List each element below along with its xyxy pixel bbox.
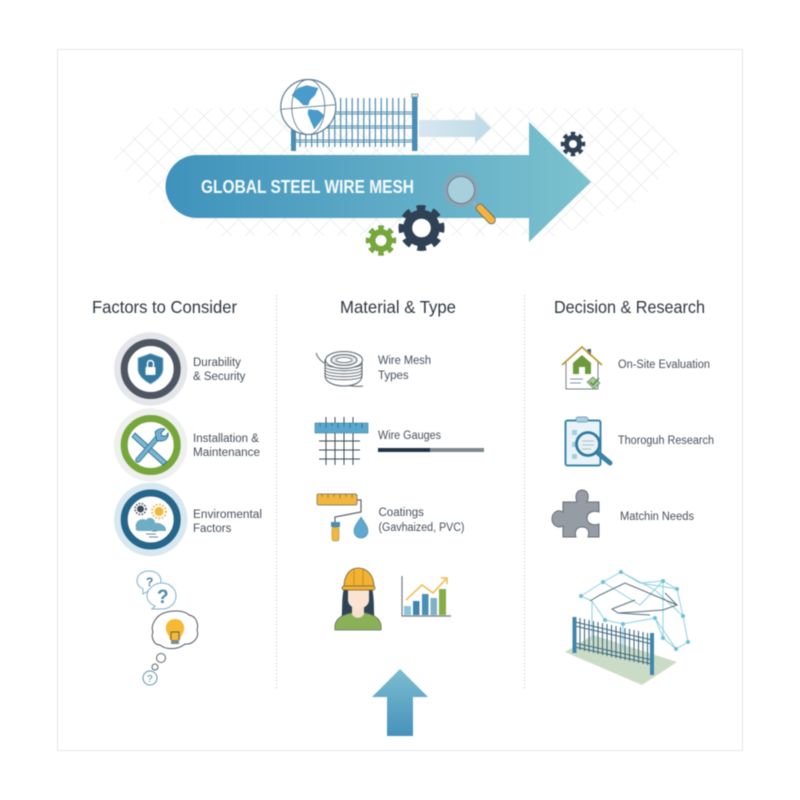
main arrow — [166, 122, 591, 242]
label: installation: Maintenance — [193, 447, 260, 459]
header banner — [110, 80, 680, 254]
panel: decision and research — [552, 297, 714, 685]
title: GLOBAL STEEL WIRE MESH — [201, 177, 414, 197]
network — [579, 570, 690, 651]
label: environmental: Factors — [193, 523, 232, 535]
icon: wire coil — [316, 352, 363, 386]
icon: shield — [138, 354, 163, 384]
icon: clipboard — [566, 417, 610, 466]
heading: decision: Decision & Research — [554, 297, 705, 317]
thorough research item — [566, 417, 714, 466]
label: thorough research: Thoroguh Research — [618, 435, 714, 447]
icon: ruler and grid — [315, 417, 368, 465]
label: wire mesh types: Wire Mesh — [378, 355, 431, 367]
outer frame — [58, 50, 742, 750]
icon: thought bubbles: ? — [147, 674, 153, 685]
fence — [291, 94, 418, 151]
icon: small gear — [562, 134, 584, 154]
coatings item — [317, 494, 465, 541]
icon: magnifier — [446, 174, 492, 220]
label: wire mesh types: Types — [378, 370, 409, 382]
installation item — [114, 408, 260, 482]
label: coatings: (Gavhaized, PVC) — [378, 522, 465, 534]
bar and line chart — [402, 576, 451, 616]
gauge bar — [378, 448, 484, 452]
globe icon — [281, 80, 336, 134]
on-site evaluation item — [562, 347, 710, 389]
pickets and rails — [580, 618, 648, 665]
panel: factors to consider — [92, 297, 262, 685]
icon: worker — [335, 568, 381, 630]
label: durability: & Security — [193, 371, 246, 383]
heading: factors: Factors to Consider — [92, 297, 237, 317]
fence and network illustration — [565, 570, 690, 685]
icon: puzzle piece — [552, 490, 599, 537]
panel: material and type — [315, 297, 484, 736]
icon: house — [562, 347, 602, 389]
icon: tools — [132, 429, 168, 465]
heading: material: Material & Type — [340, 297, 456, 317]
wire gauges item — [315, 417, 484, 465]
icon: thought bubbles: ? — [146, 575, 153, 589]
icon: green gear — [368, 228, 394, 254]
matching needs item — [552, 490, 694, 537]
up arrow — [372, 669, 428, 736]
icon: thought bubbles: ? — [157, 587, 169, 608]
background mesh lattice — [110, 108, 680, 236]
small arrow — [419, 112, 491, 143]
icon: thought bubbles — [137, 571, 198, 685]
floor — [565, 635, 677, 685]
label: environmental: Enviromental — [193, 509, 262, 521]
wire mesh types item — [316, 352, 431, 386]
fence posts — [572, 617, 576, 653]
label: matching needs: Matchin Needs — [620, 511, 694, 523]
environmental item — [114, 483, 262, 556]
icon: weather — [135, 504, 166, 537]
icon: large gear — [402, 208, 442, 248]
label: coatings: Coatings — [378, 507, 424, 519]
durability item — [114, 332, 246, 406]
label: installation: Installation & — [193, 433, 259, 445]
label: on-site evaluation: On-Site Evaluation — [618, 359, 710, 371]
label: wire gauges: Wire Gauges — [378, 430, 441, 442]
icon: paint roller — [317, 494, 368, 541]
label: durability: Durability — [193, 357, 241, 369]
